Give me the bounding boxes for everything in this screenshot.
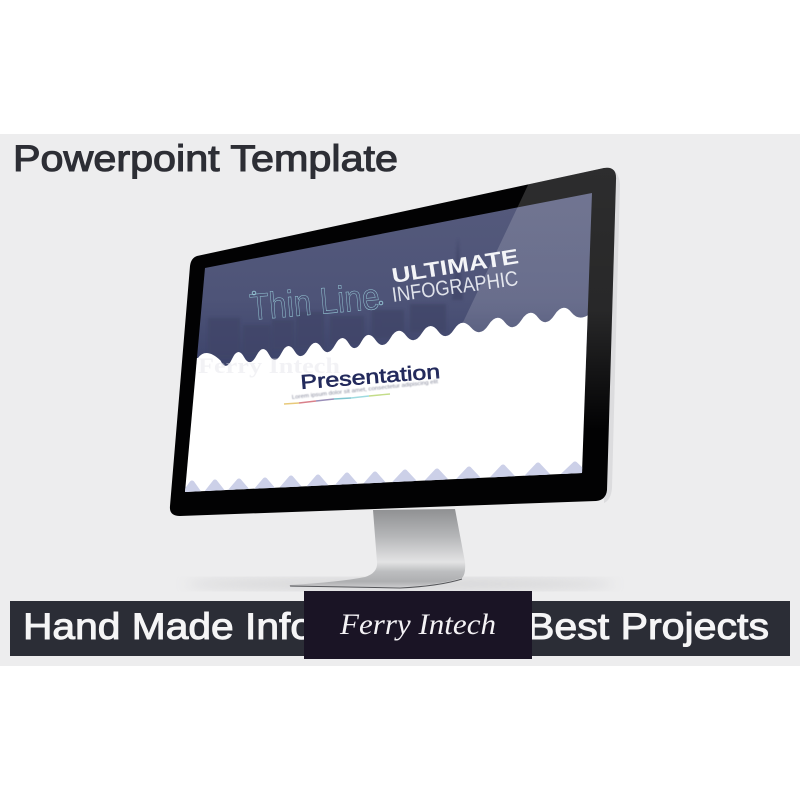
text: INFOGRAPHIC: INFOGRAPHIC xyxy=(391,267,520,307)
monitor stand xyxy=(289,509,465,587)
banner text left: Hand Made Info xyxy=(23,606,313,647)
glare across bezel and screen xyxy=(436,168,616,404)
watermark: Ferry Intech xyxy=(198,353,340,378)
header with city photo xyxy=(180,190,600,370)
text: Thin Line: Thin Line xyxy=(248,276,381,328)
stand shadow xyxy=(185,578,615,590)
banner bar xyxy=(10,601,790,656)
grey panel xyxy=(0,134,800,666)
monitor silver edge xyxy=(604,168,620,503)
white slide body with wavy edge xyxy=(178,308,592,500)
Thin Line end dots xyxy=(252,291,383,305)
text: ULTIMATE: ULTIMATE xyxy=(390,245,520,288)
coloured line accents xyxy=(284,394,390,404)
stand foot edge xyxy=(290,579,462,588)
text: lorem subtitle: Lorem ipsum dolor sit amet, consectetur adipiscing elit xyxy=(292,379,439,401)
banner text right: Best Projects xyxy=(527,606,769,647)
watermark box text: Ferry Intech xyxy=(339,608,496,641)
city skyline xyxy=(210,249,462,326)
text: Presentation: Presentation xyxy=(300,361,441,394)
bottom rounded waves xyxy=(185,462,582,492)
icon: desktop monitor xyxy=(170,165,620,590)
monitor bezel xyxy=(170,168,616,516)
title: Powerpoint Template xyxy=(13,138,398,179)
screen xyxy=(178,190,600,500)
watermark box xyxy=(304,591,532,659)
